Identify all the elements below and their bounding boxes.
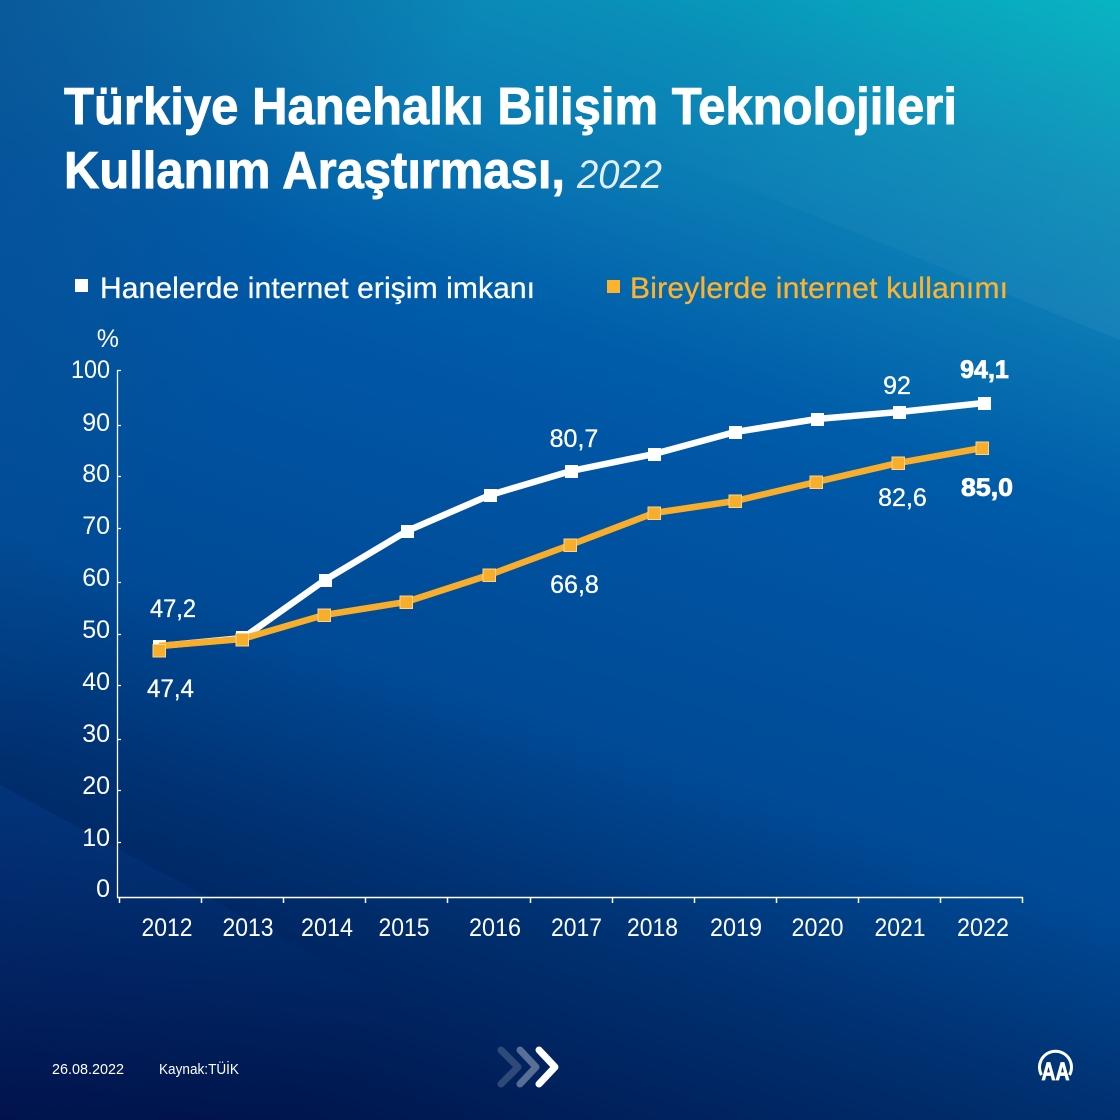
y axis: 90 xyxy=(82,409,110,437)
series: individuals xyxy=(153,442,988,657)
data labels: 80,7 xyxy=(550,425,598,453)
y axis: % xyxy=(97,325,119,353)
title: 2022 xyxy=(576,153,662,197)
footer date: 26.08.2022 xyxy=(52,1061,124,1078)
title xyxy=(64,78,957,200)
y axis: 100 xyxy=(71,356,110,384)
x axis: 2017 xyxy=(551,914,602,942)
data labels: 66,8 xyxy=(550,571,599,599)
icon: AA logo xyxy=(1040,1051,1072,1086)
line chart xyxy=(71,325,1023,942)
series: households xyxy=(153,397,991,653)
y axis: 50 xyxy=(82,616,110,644)
x axis: 2019 xyxy=(710,914,762,942)
y axis: 20 xyxy=(82,772,110,800)
data labels: 85,0 xyxy=(961,474,1013,502)
x axis: 2021 xyxy=(874,914,926,942)
y axis: 60 xyxy=(82,564,110,592)
title: Türkiye Hanehalkı Bilişim Teknolojileri xyxy=(64,78,957,136)
title: Kullanım Araştırması, xyxy=(64,142,565,200)
y axis: 70 xyxy=(82,512,110,540)
x axis: 2020 xyxy=(792,914,844,942)
legend: individuals: Bireylerde internet kullanımı xyxy=(630,272,1008,305)
x axis: 2015 xyxy=(378,914,430,942)
y axis: 10 xyxy=(82,824,110,852)
legend: households: Hanelerde internet erişim imkanı xyxy=(100,272,535,305)
x axis: 2018 xyxy=(627,914,678,942)
icon: AA logo: AA xyxy=(1042,1058,1070,1086)
data labels: 94,1 xyxy=(960,356,1009,384)
footer source: Kaynak:TÜİK xyxy=(159,1060,239,1078)
x axis xyxy=(117,897,1023,942)
y axis: 40 xyxy=(82,668,110,696)
x axis: 2022 xyxy=(957,914,1009,942)
y axis: 30 xyxy=(82,720,110,748)
data labels: 47,4 xyxy=(147,675,194,703)
x axis: 2012 xyxy=(142,914,192,942)
x axis: 2016 xyxy=(469,914,521,942)
data labels: 92 xyxy=(883,372,911,400)
x axis: 2013 xyxy=(222,914,274,942)
data labels xyxy=(147,356,1013,703)
legend xyxy=(75,272,1008,305)
y axis: 80 xyxy=(82,460,110,488)
y axis: 0 xyxy=(96,875,110,903)
y axis xyxy=(71,325,121,903)
icon: chevrons xyxy=(501,1050,555,1084)
data labels: 47,2 xyxy=(150,595,196,623)
data labels: 82,6 xyxy=(878,484,927,512)
x axis: 2014 xyxy=(301,914,353,942)
